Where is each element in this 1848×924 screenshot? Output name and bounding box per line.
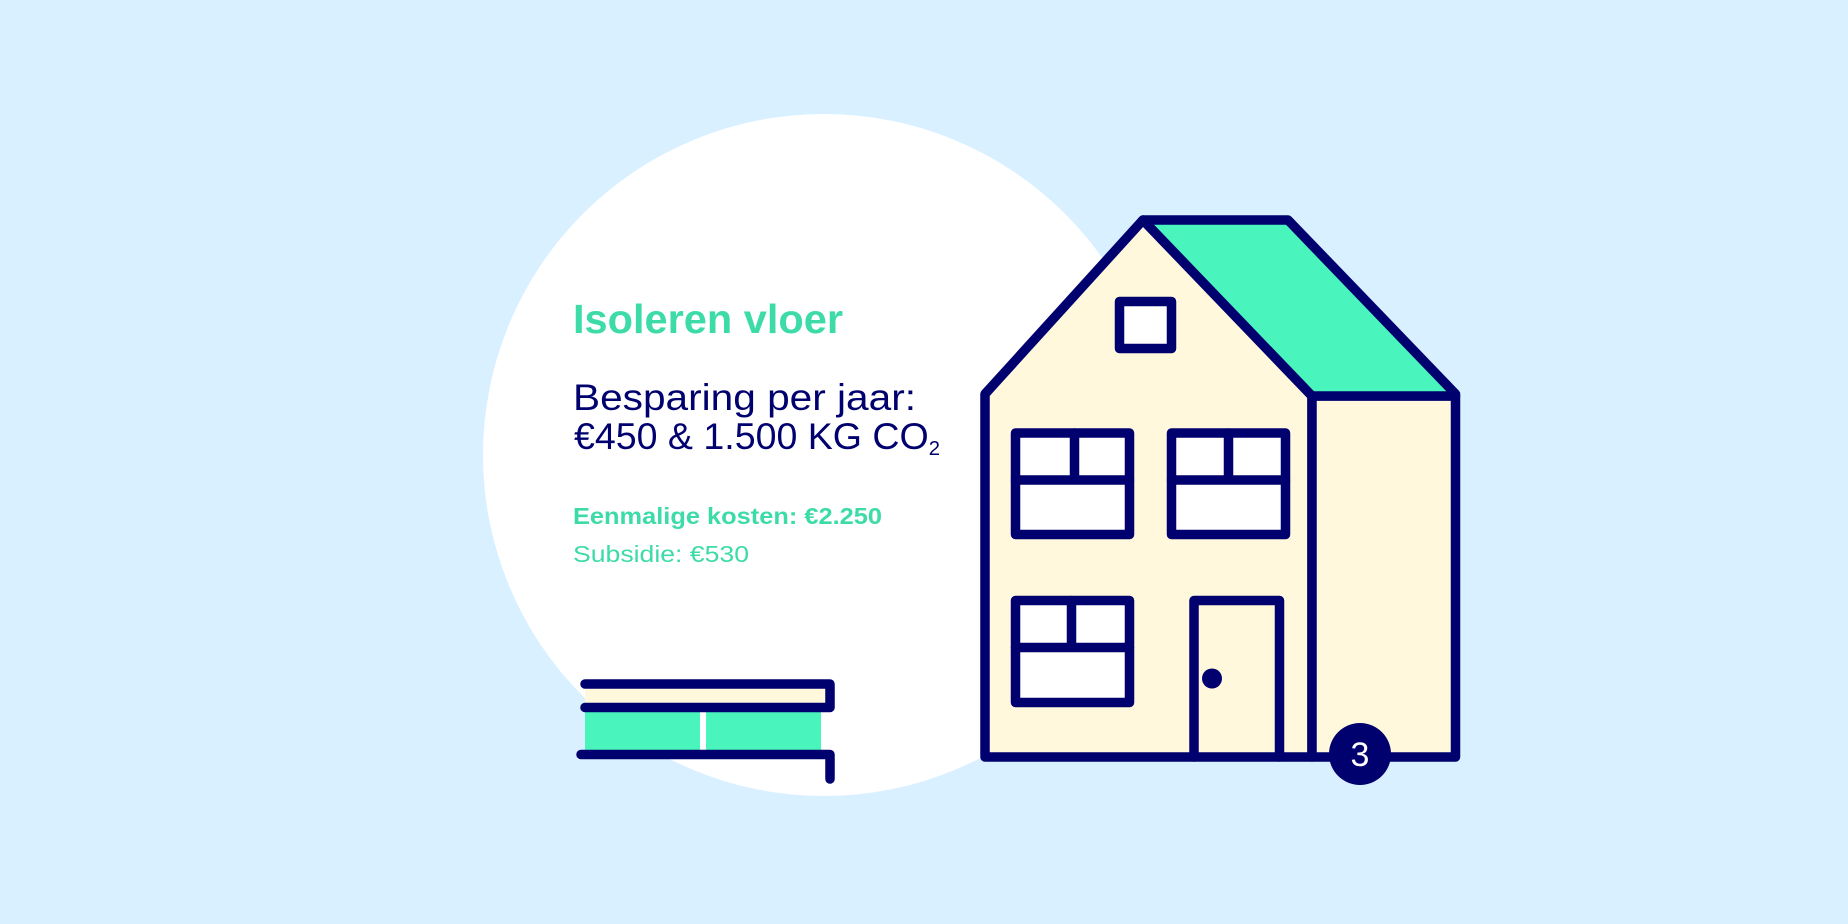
title: Isoleren vloer	[573, 296, 843, 342]
text block: savings per year: €450 & 1.500 KG CO	[574, 416, 924, 457]
house side wall	[1312, 396, 1456, 757]
floor bottom line	[581, 754, 830, 779]
insulation right panel	[706, 711, 821, 750]
window upper right	[1172, 433, 1286, 534]
attic window	[1120, 302, 1172, 348]
text: subsidy: Subsidie: €530	[573, 541, 749, 567]
text block: savings per year: 2	[929, 438, 940, 460]
text: one-off costs: Eenmalige kosten: €2.250	[573, 503, 882, 529]
house illustration	[985, 220, 1456, 757]
door knob	[1202, 668, 1222, 688]
number badge	[1329, 723, 1391, 785]
text block: savings per year	[573, 377, 940, 460]
window lower left	[1016, 600, 1130, 702]
text block: savings per year: Besparing per jaar:	[573, 377, 916, 418]
door	[1194, 600, 1280, 757]
white circle	[483, 114, 1165, 796]
house front wall	[985, 220, 1312, 757]
floor top line	[585, 684, 830, 708]
window upper left	[1016, 433, 1130, 534]
number badge: 3	[1351, 736, 1369, 774]
green roof	[1143, 220, 1456, 396]
floor cream layer	[585, 688, 827, 704]
icon: floor insulation	[581, 684, 830, 779]
insulation left panel	[585, 711, 700, 750]
